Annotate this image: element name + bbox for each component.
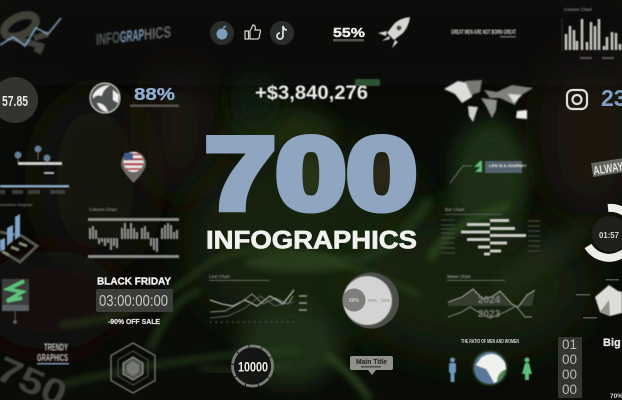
trendy graphics	[37, 342, 69, 364]
flag pin	[121, 152, 146, 183]
instagram icon	[567, 90, 587, 109]
quote	[451, 30, 516, 38]
vertical countdown: 00	[562, 367, 577, 382]
earth globe	[472, 350, 508, 386]
number badge: 10000	[238, 358, 268, 374]
bar chart panel	[441, 207, 540, 254]
revenue counter: +$3,840,276	[255, 83, 368, 104]
skewed infographics word: HICS	[144, 23, 171, 44]
bubble chart	[342, 272, 399, 328]
timeline map	[0, 146, 69, 192]
tiktok icon	[270, 21, 294, 45]
gauge circle: 57.85	[2, 93, 28, 110]
ratio title: THE RATIO OF MEN AND WOMEN	[461, 339, 519, 345]
countdown: 03:00:00:00	[99, 293, 168, 310]
vertical countdown: 00	[562, 382, 577, 397]
percent stat: 88%	[134, 84, 176, 104]
vertical countdown: 00	[562, 352, 577, 367]
sale note: -90% OFF SALE	[108, 319, 160, 326]
skewed infographics word: INFO	[96, 29, 120, 49]
bubble chart: 50%	[349, 298, 360, 304]
percent stat	[130, 84, 179, 107]
main title callout	[350, 356, 393, 375]
bitcoin line graphic	[0, 11, 61, 52]
green icon signboard	[2, 279, 29, 324]
thumbs up icon	[245, 25, 260, 39]
quote: GREAT MEN ARE NOT BORN GREAT	[451, 30, 516, 36]
skewed infographics word	[96, 23, 171, 49]
man figure	[449, 358, 456, 382]
world map	[444, 80, 533, 122]
column chart panel	[88, 207, 179, 258]
bar chart panel: Bar Chart	[445, 207, 465, 212]
wave chart panel: 2024	[478, 295, 501, 306]
vertical countdown: 01	[562, 337, 577, 352]
bubble chart: 20%	[381, 298, 390, 303]
title word: INFOGRAPHICS	[206, 226, 417, 254]
wave chart panel	[447, 274, 535, 320]
life label: LIFE IS A JOURNEY	[489, 163, 527, 168]
donut timer: 01:57	[599, 230, 619, 240]
trend line	[0, 18, 61, 46]
vertical countdown	[558, 337, 582, 398]
hexagon radar	[111, 343, 155, 393]
main title callout: Main Title	[356, 359, 387, 366]
line chart panel	[209, 274, 307, 322]
isometric bar chart	[0, 202, 37, 262]
badge	[355, 79, 380, 86]
black friday title: BLACK FRIDAY	[97, 276, 171, 288]
donut timer	[588, 208, 622, 258]
life label	[450, 161, 527, 183]
trendy graphics: GRAPHICS	[37, 353, 68, 364]
wave chart panel: 2023	[478, 309, 501, 320]
bubble chart: 30%	[368, 298, 377, 303]
column chart panel: Column Chart	[89, 207, 118, 212]
gauge circle	[0, 77, 38, 123]
countdown	[96, 289, 173, 312]
wave chart panel: Wave Chart	[447, 274, 471, 279]
isometric bar chart: Isometric Diagram	[0, 202, 33, 207]
star radar	[576, 279, 622, 318]
number badge	[232, 346, 272, 386]
caption	[333, 39, 364, 42]
success stat: 55%	[333, 25, 366, 40]
column chart top right: Column Chart	[564, 7, 593, 12]
globe icon	[90, 83, 120, 113]
column chart top right	[562, 7, 620, 59]
skewed infographics word: GRAP	[120, 26, 144, 46]
title number: 700	[205, 117, 417, 231]
caption	[130, 104, 179, 107]
woman figure	[522, 358, 532, 380]
apple icon	[210, 21, 234, 45]
trendy graphics: TRENDY	[44, 342, 68, 354]
big label: Big	[603, 337, 621, 349]
columns	[90, 223, 177, 252]
line chart panel: Line Chart	[209, 274, 231, 279]
bars	[461, 220, 526, 254]
rocket icon	[378, 17, 410, 48]
